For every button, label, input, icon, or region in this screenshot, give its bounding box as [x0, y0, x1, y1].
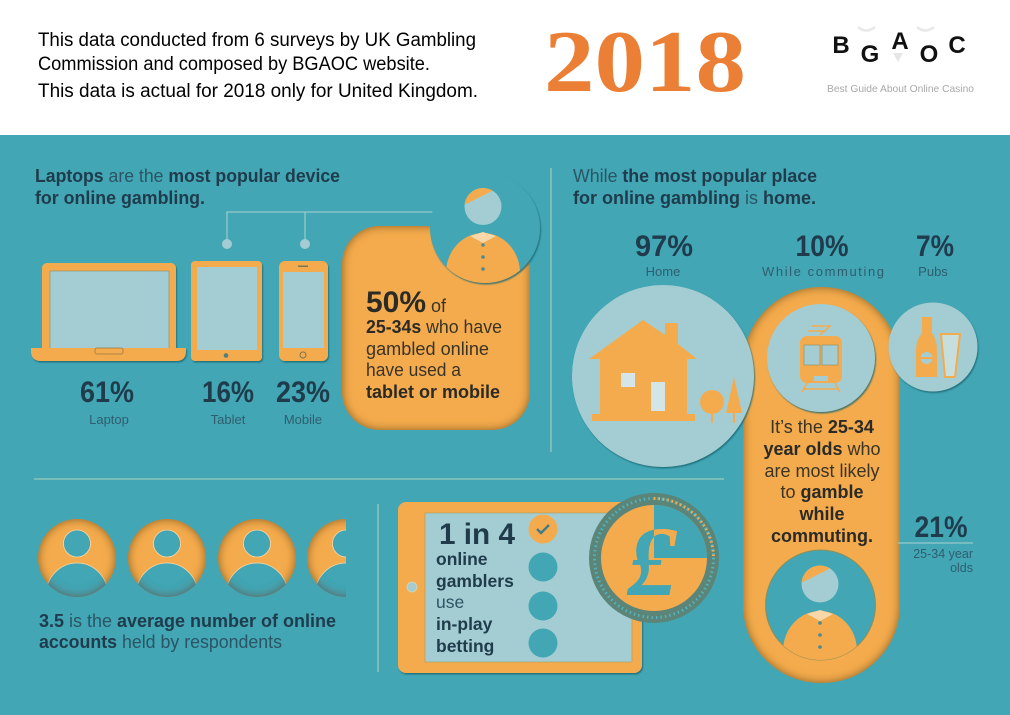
- pill text: It’s the 25-34: [770, 417, 874, 437]
- account icon 3: [218, 519, 296, 597]
- panel: 50 percent callout: tablet or mobile: [366, 382, 500, 402]
- panel: in-play betting tablet: in-play: [436, 614, 493, 634]
- logo: A: [891, 28, 909, 55]
- heading: places: for online gambling is home.: [573, 188, 816, 208]
- pill text: year olds who: [763, 439, 881, 459]
- device stats: Mobile: [284, 412, 322, 427]
- panel: in-play betting tablet: 1 in 4: [439, 518, 515, 551]
- icon: checked circle: [528, 514, 558, 544]
- heading: places: While the most popular place: [573, 166, 817, 186]
- heading: devices: [35, 166, 340, 208]
- connector lines to tablet and mobile: [222, 212, 440, 249]
- panel: 50 percent callout: gambled online: [366, 339, 489, 359]
- logo: [827, 27, 974, 95]
- pill text: are most likely: [764, 461, 880, 481]
- heading: devices: for online gambling.: [35, 188, 205, 208]
- icon: train in circle: [767, 304, 875, 412]
- panel: in-play betting tablet: betting: [436, 636, 494, 656]
- place stats: [635, 230, 954, 279]
- accounts caption: [39, 611, 336, 652]
- stat: 21 percent: olds: [950, 561, 973, 575]
- device stats: 16%: [202, 376, 254, 409]
- panel: in-play betting tablet: [398, 502, 642, 673]
- icon: laptop: [31, 263, 186, 361]
- place stats: Home: [646, 264, 680, 279]
- device stats: 23%: [276, 376, 330, 409]
- accounts caption: 3.5 is the average number of online: [39, 611, 336, 631]
- accounts caption: accounts held by respondents: [39, 632, 282, 652]
- place stats: While commuting: [762, 264, 884, 279]
- icons: account people: [38, 519, 346, 597]
- icon: pound coin: £: [626, 506, 678, 617]
- panel: 50 percent callout: 25-34s who have: [366, 317, 502, 337]
- logo: B: [832, 32, 850, 59]
- logo: C: [948, 32, 966, 59]
- account icon half: [307, 519, 346, 597]
- panel: in-play betting tablet: online: [436, 549, 488, 569]
- panel: in-play betting tablet: gamblers: [436, 571, 514, 591]
- panel: 50 percent callout: have used a: [366, 360, 462, 380]
- pill text: commuting.: [771, 526, 873, 546]
- panel: commuting pill: [743, 287, 900, 691]
- icon: person in circle: [430, 187, 542, 286]
- icon: pubs circle: [888, 302, 978, 392]
- logo: O: [920, 41, 938, 68]
- icon: person in circle: [765, 550, 876, 660]
- device stats: Laptop: [89, 412, 129, 427]
- place stats: 97%: [635, 230, 693, 263]
- place stats: 7%: [916, 230, 954, 263]
- heading: places: [573, 166, 817, 208]
- place stats: Pubs: [918, 264, 948, 279]
- icon: mobile: [279, 261, 328, 361]
- intro text: This data is actual for 2018 only for United Kingdom.: [38, 81, 478, 102]
- icon: tablet: [191, 261, 262, 361]
- intro text: This data conducted from 6 surveys by UK Gambling: [38, 30, 476, 51]
- logo: Best Guide About Online Casino: [827, 83, 974, 95]
- pill text: [763, 417, 881, 546]
- header background: [0, 0, 1010, 135]
- intro text: [38, 30, 478, 102]
- panel: 50 percent callout: [342, 170, 540, 430]
- stat: 21 percent: 21%: [914, 511, 968, 544]
- pill text: to gamble: [780, 482, 864, 502]
- panel: 50 percent callout: 50% of: [366, 286, 447, 319]
- stat: 21 percent: [898, 511, 973, 575]
- intro text: Commission and composed by BGAOC website.: [38, 54, 430, 75]
- account icon 1: [38, 519, 116, 597]
- heading: devices: Laptops are the most popular device: [35, 166, 340, 186]
- device stats: [80, 376, 330, 427]
- stat: 21 percent: 25-34 year: [913, 547, 973, 561]
- device stats: Tablet: [211, 412, 246, 427]
- icon: pound coin: [589, 493, 719, 623]
- year title: 2018: [544, 14, 746, 111]
- icon: pound coin: £: [626, 506, 678, 617]
- panel: in-play betting tablet: use: [436, 592, 464, 612]
- logo: G: [861, 41, 879, 68]
- account icon 2: [128, 519, 206, 597]
- icon: home circle: [572, 285, 754, 467]
- device stats: 61%: [80, 376, 134, 409]
- place stats: 10%: [796, 230, 848, 263]
- pill text: while: [798, 504, 845, 524]
